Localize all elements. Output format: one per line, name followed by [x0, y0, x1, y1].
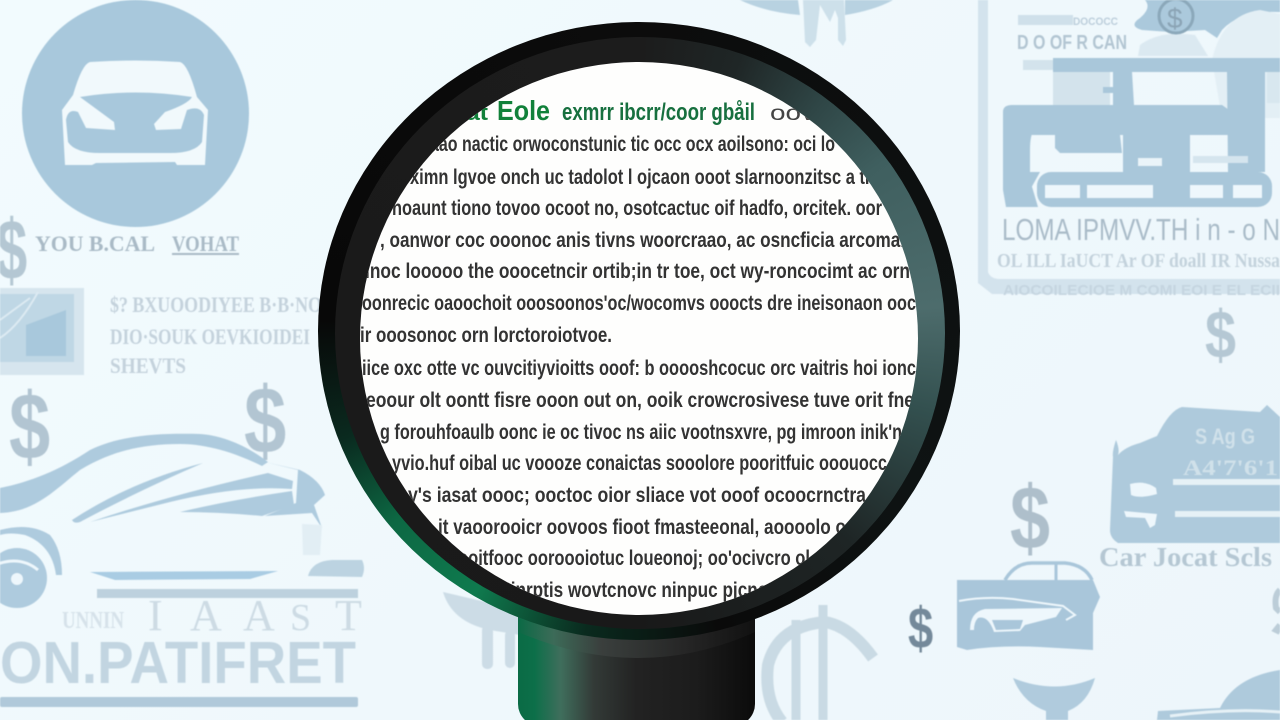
- text: faded banner TRAST: T: [335, 591, 362, 640]
- contract text paragraph two: ooitfooc ooroooiotuc loueonoj; oo'ocivcro ol: [458, 547, 810, 570]
- panel: loan document frame: [978, 0, 1280, 299]
- contract text paragraph two: [362, 357, 916, 602]
- icon: partial dollar right edge: [1276, 590, 1280, 632]
- text: document header: DOCOCC: [1073, 16, 1118, 28]
- text: document header: D O OF R CAN: [1017, 32, 1127, 54]
- icon: sports car outline: [0, 434, 364, 608]
- text: faded paragraph: $? BXUOODIYEE B·B·NO: [110, 292, 322, 317]
- icon: dollar above small car: $: [1010, 468, 1050, 569]
- icon: dollar coin and blob: [1134, 0, 1280, 118]
- text: Car Jocat Scls: Car Jocat Scls: [1099, 542, 1272, 572]
- icon: crescent stand: [1013, 678, 1095, 720]
- text: faded banner headline: ON.PATIFRET: [0, 630, 356, 696]
- green heading: oov: [770, 102, 816, 125]
- icon: small dark dollar: $: [908, 597, 933, 661]
- text: faded paragraph: [110, 292, 322, 378]
- text: faded paragraph: DIO·SOUK OEVKIOIDEI: [110, 324, 310, 349]
- magnifier inner rim: [335, 37, 945, 629]
- icon: dollar upper right: $: [1205, 298, 1236, 373]
- text: document footer line: AIOCOILECIOE M COMI EOI E EL ECII: [1003, 282, 1280, 299]
- text: faded car label: [35, 231, 239, 256]
- text: faded banner TRAST: UNNIN: [62, 608, 125, 634]
- icon: vehicle silhouette: [1003, 58, 1280, 207]
- magnifier outer rim: [318, 22, 960, 640]
- icon: faded dollar right of handle: [767, 605, 873, 720]
- icon: chart panel: [0, 288, 84, 375]
- icon: small car: [957, 563, 1100, 650]
- icon: car front with text: [1110, 405, 1280, 543]
- green heading: [466, 95, 816, 126]
- green heading: Eole: [497, 95, 550, 126]
- icon: partial car bottom right: [1157, 670, 1280, 720]
- magnifier handle: [518, 610, 755, 720]
- icon: dollar left: $: [9, 374, 50, 480]
- contract text paragraph two: tinrptis wovtcnovc ninpuc pjcnct: [505, 579, 773, 602]
- icon: faded dollar left of handle: [443, 592, 520, 669]
- icon: car in circle: [22, 0, 249, 227]
- text: faded banner TRAST: S: [290, 597, 311, 639]
- green heading: exmrr ibcrr/coor gbåil: [562, 99, 755, 126]
- text: faded banner TRAST: A: [243, 591, 275, 640]
- text: document header: [1017, 15, 1127, 54]
- text: faded paragraph: SHEVTS: [110, 353, 186, 378]
- icon: dollar coin and blob: $: [1167, 3, 1183, 34]
- text: faded car label: YOU B.CAL: [35, 231, 155, 256]
- lens with magnified contract text: [360, 62, 918, 615]
- divider bar bottom left: [0, 697, 358, 707]
- text: on-car label: A4'7'6'1: [1183, 455, 1278, 480]
- text: on-car label: [1183, 424, 1278, 480]
- contract text paragraph one: ir ooosonoc orn lorctoroiotvoe.: [360, 324, 612, 347]
- icon: partial dollar top centre: [740, 0, 893, 47]
- green heading: at: [466, 100, 489, 125]
- text: faded banner TRAST: [62, 591, 362, 640]
- text: on-car label: S Ag G: [1195, 424, 1255, 449]
- text: faded banner TRAST: A: [190, 591, 222, 640]
- text: faded car label: VOHAT: [172, 231, 239, 256]
- icon: dollar above car: $: [244, 368, 286, 474]
- text: faded banner TRAST: I: [148, 591, 163, 640]
- contract text paragraph one: [360, 133, 916, 347]
